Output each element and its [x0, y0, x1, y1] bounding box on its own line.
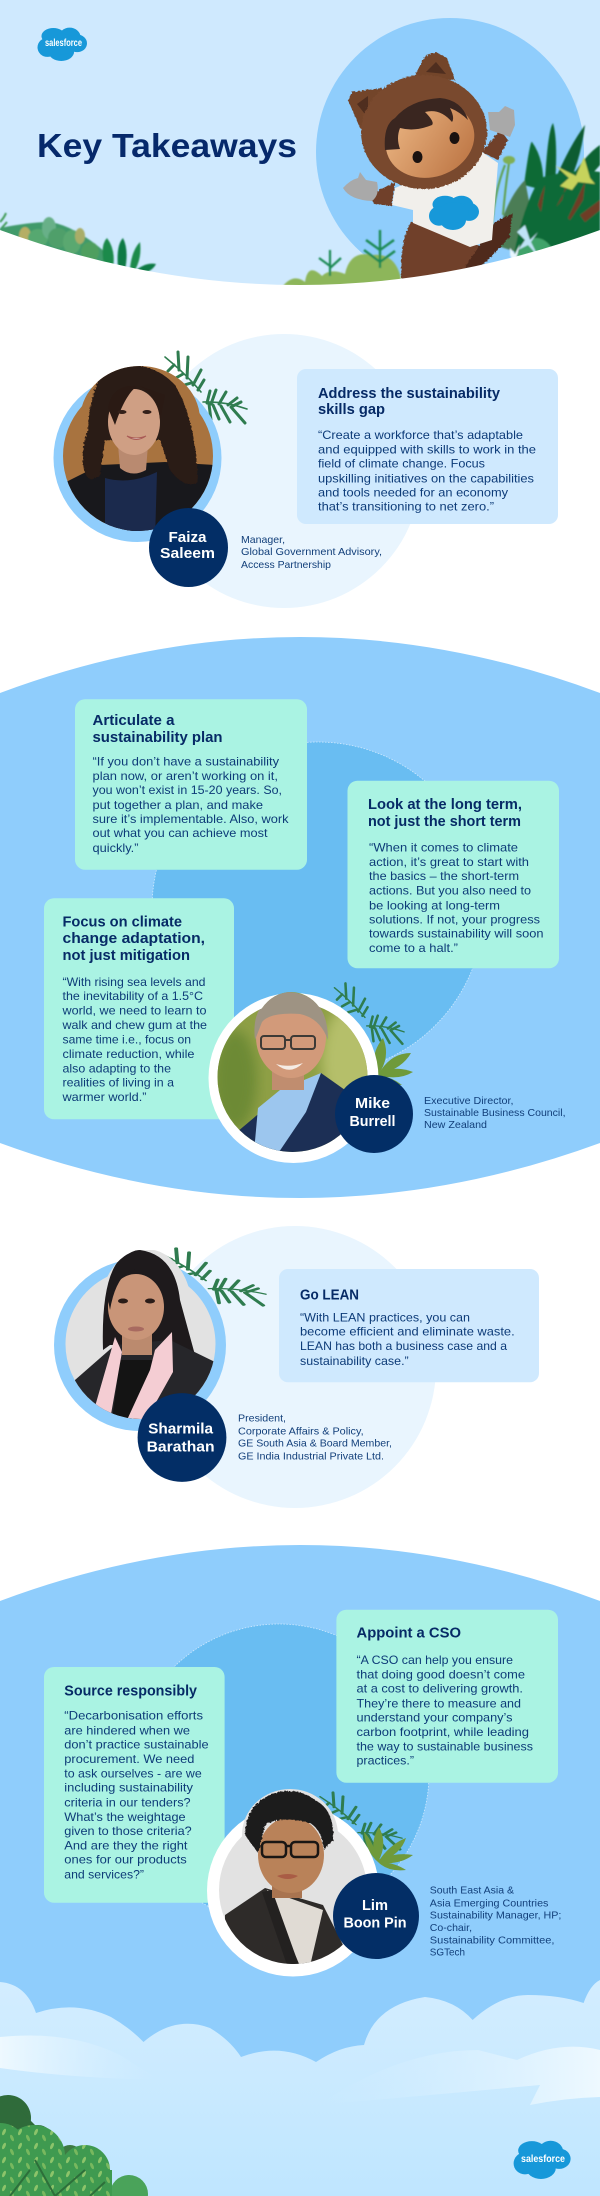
heading: Source responsibly: [64, 1684, 197, 1700]
quote: practices.”: [356, 1754, 414, 1768]
portrait ring: [54, 1259, 226, 1431]
portrait: Sharmila: [66, 1250, 216, 1419]
name badge: Burrell: [350, 1113, 396, 1130]
quote: [92, 754, 290, 855]
card: go lean: [279, 1269, 539, 1382]
quote: [300, 1310, 515, 1368]
quote: world, we need to learn to: [61, 1004, 207, 1018]
quote: don’t practice sustainable: [64, 1738, 209, 1752]
logo: salesforce top: [38, 28, 87, 61]
logo: salesforce bottom: [514, 2141, 571, 2179]
quote: actions. But you also need to: [369, 883, 531, 897]
band background: [0, 637, 600, 1198]
mascot shirt: [392, 152, 498, 247]
portrait ring: [54, 374, 222, 542]
job title: New Zealand: [424, 1119, 487, 1131]
background circle: [154, 1226, 436, 1508]
icon: palm leaf: [334, 983, 404, 1044]
quote: come to a halt.”: [369, 941, 458, 955]
job title: [238, 1413, 392, 1462]
quote: They’re there to measure and: [356, 1696, 521, 1710]
heading: [318, 386, 500, 418]
job title: [241, 534, 382, 571]
plants: hero left: [0, 213, 156, 274]
quote: ones for our products: [64, 1853, 187, 1867]
quote: [64, 1708, 209, 1881]
quote: quickly.”: [92, 841, 138, 855]
portrait: Mike: [218, 992, 368, 1152]
tree bottom left: [0, 2095, 148, 2196]
quote: to ask ourselves - are we: [64, 1766, 202, 1780]
quote: sure it’s implementable. Also, work: [92, 812, 290, 826]
quote: put together a plan, and make: [92, 798, 263, 812]
mascot eyes: [412, 132, 460, 163]
quote: at a cost to delivering growth.: [356, 1682, 523, 1696]
icon: broad leaves: [374, 1038, 413, 1085]
job title: Sustainable Business Council,: [424, 1107, 566, 1119]
mascot hood: [361, 75, 487, 189]
icon: broad leaves: [364, 1827, 413, 1870]
portrait ring: [208, 993, 378, 1163]
icon: palm leaf: [320, 1793, 402, 1849]
mascot left arm and mitten: [343, 172, 395, 206]
quote: given to those criteria?: [64, 1824, 192, 1838]
quote: you won’t exist in 15-20 years. So,: [92, 783, 282, 797]
name badge: [138, 1393, 226, 1482]
section: Sharmila Barathan: [54, 1226, 539, 1508]
card: source responsibly: [44, 1667, 225, 1903]
quote: and tools needed for an economy: [318, 486, 508, 500]
quote: warmer world.”: [61, 1090, 147, 1104]
quote: out what you can achieve most: [92, 826, 268, 840]
quote: and equipped with skills to work in the: [318, 442, 536, 456]
quote: [61, 975, 207, 1104]
name badge: [335, 1075, 413, 1153]
name badge: Boon Pin: [344, 1914, 406, 1931]
inner circle: [129, 1624, 429, 1924]
card: sustainability plan: [75, 699, 307, 870]
quote: criteria in our tenders?: [64, 1796, 191, 1810]
section: Faiza Saleem: [50, 334, 558, 608]
mascot shirt logo: [429, 196, 479, 230]
quote: And are they the right: [64, 1838, 188, 1852]
heading: Appoint a CSO: [356, 1626, 461, 1642]
quote: “Decarbonisation efforts: [64, 1708, 203, 1722]
mascot body: [401, 222, 480, 284]
quote: towards sustainability will soon: [369, 927, 544, 941]
mascot hair: [385, 98, 468, 150]
job title: Corporate Affairs & Policy,: [238, 1426, 364, 1438]
quote: walk and chew gum at the: [61, 1018, 207, 1032]
heading: not just mitigation: [62, 948, 190, 964]
heading: Look at the long term,: [368, 797, 522, 813]
quote: be looking at long-term: [369, 898, 500, 912]
job title: South East Asia &: [430, 1885, 514, 1897]
job title: Executive Director,: [424, 1095, 514, 1107]
quote: also adapting to the: [62, 1061, 171, 1075]
cloud wisp right: [318, 2047, 600, 2105]
heading: not just the short term: [368, 814, 521, 830]
job title: Manager,: [241, 534, 285, 546]
name badge: Lim: [362, 1897, 388, 1914]
heading: sustainability plan: [92, 730, 222, 746]
portrait ring: [207, 1804, 379, 1976]
job title: President,: [238, 1413, 286, 1425]
card: long term: [348, 781, 559, 968]
quote: field of climate change. Focus: [318, 457, 485, 471]
quote: plan now, or aren’t working on it,: [92, 769, 278, 783]
heading: [92, 713, 222, 746]
job title: Asia Emerging Countries: [430, 1898, 548, 1910]
quote: become efficient and eliminate waste.: [300, 1325, 515, 1339]
quote: realities of living in a: [62, 1076, 174, 1090]
cloud wisp left: [0, 2035, 160, 2080]
quote: the way to sustainable business: [356, 1739, 533, 1753]
job title: [424, 1095, 566, 1131]
quote: and services?”: [64, 1867, 144, 1881]
job title: SGTech: [430, 1946, 465, 1958]
mascot face: [376, 91, 484, 189]
name badge: Saleem: [160, 545, 215, 562]
clouds: [0, 1980, 600, 2196]
job title: GE South Asia & Board Member,: [238, 1437, 392, 1449]
quote: understand your company’s: [356, 1711, 512, 1725]
quote: that’s transitioning to net zero.”: [318, 500, 494, 514]
quote: that doing good doesn’t come: [356, 1667, 525, 1681]
card: CSO: [336, 1610, 558, 1783]
mascot ears: [348, 52, 455, 130]
name badge: Sharmila: [148, 1421, 214, 1438]
section: Mike Burrell band: [0, 637, 600, 1198]
background circle: [147, 334, 421, 608]
white curve below header: [0, 230, 600, 345]
hero circle: [316, 18, 584, 286]
heading: change adaptation,: [62, 931, 205, 947]
mascot tail: [462, 213, 513, 272]
heading: Focus on climate: [62, 915, 182, 931]
job title: Sustainability Manager, HP;: [430, 1910, 561, 1922]
job title: Access Partnership: [241, 559, 331, 571]
quote: upskilling initiatives on the capabilities: [318, 471, 534, 485]
quote: climate reduction, while: [62, 1047, 195, 1061]
quote: [318, 428, 536, 514]
card: adaptation: [44, 898, 234, 1119]
heading: [62, 915, 205, 964]
heading: Go LEAN: [300, 1287, 359, 1303]
portrait: Lim: [219, 1789, 366, 1964]
quote: LEAN has both a business case and a: [300, 1339, 507, 1353]
name badge: Mike: [355, 1095, 390, 1112]
title: Key Takeaways: [37, 127, 297, 164]
quote: carbon footprint, while leading: [356, 1725, 529, 1739]
quote: including sustainability: [64, 1781, 193, 1795]
header background: [0, 0, 600, 345]
quote: the inevitability of a 1.5°C: [62, 989, 203, 1003]
quote: solutions. If not, your progress: [369, 912, 540, 926]
name badge: Barathan: [147, 1439, 215, 1456]
heading: Address the sustainability: [318, 386, 500, 402]
mascot inner ears: [357, 62, 446, 118]
job title: GE India Industrial Private Ltd.: [238, 1450, 384, 1462]
job title: Global Government Advisory,: [241, 546, 382, 558]
quote: “Create a workforce that’s adaptable: [318, 428, 523, 442]
logo: salesforce top: salesforce: [45, 38, 82, 49]
job title: Sustainability Committee,: [430, 1934, 554, 1946]
mascot: Astro: [343, 52, 515, 284]
icon: palm leaf: [165, 352, 247, 423]
plants: hero right: [280, 123, 600, 292]
quote: “With rising sea levels and: [62, 975, 206, 989]
quote: the basics – the short-term: [369, 869, 519, 883]
job title: [430, 1885, 561, 1958]
logo: salesforce bottom: salesforce: [521, 2154, 565, 2165]
quote: action, it’s great to start with: [369, 855, 529, 869]
portrait: Faiza: [63, 366, 213, 531]
mascot right arm and mitten: [482, 106, 515, 160]
quote: “If you don’t have a sustainability: [92, 754, 279, 768]
inner circle: [152, 742, 484, 1074]
card: skills gap: [297, 369, 558, 524]
heading: skills gap: [318, 402, 385, 418]
heading: [368, 797, 522, 830]
name badge: [149, 508, 228, 587]
quote: procurement. We need: [64, 1752, 194, 1766]
quote: “A CSO can help you ensure: [356, 1653, 513, 1667]
quote: sustainability case.”: [300, 1354, 409, 1368]
section: Lim Boon Pin band: [0, 1545, 600, 2062]
name badge: Faiza: [168, 529, 207, 546]
icon: palm leaf: [159, 1249, 266, 1305]
quote: are hindered when we: [64, 1723, 190, 1737]
name badge: [333, 1873, 419, 1959]
quote: [356, 1653, 533, 1768]
quote: same time i.e., focus on: [62, 1033, 191, 1047]
band background: [0, 1545, 600, 2196]
quote: “With LEAN practices, you can: [300, 1310, 470, 1324]
heading: Articulate a: [92, 713, 175, 729]
quote: What’s the weightage: [64, 1810, 186, 1824]
job title: Co-chair,: [430, 1922, 472, 1934]
quote: “When it comes to climate: [369, 841, 518, 855]
quote: [369, 841, 544, 955]
